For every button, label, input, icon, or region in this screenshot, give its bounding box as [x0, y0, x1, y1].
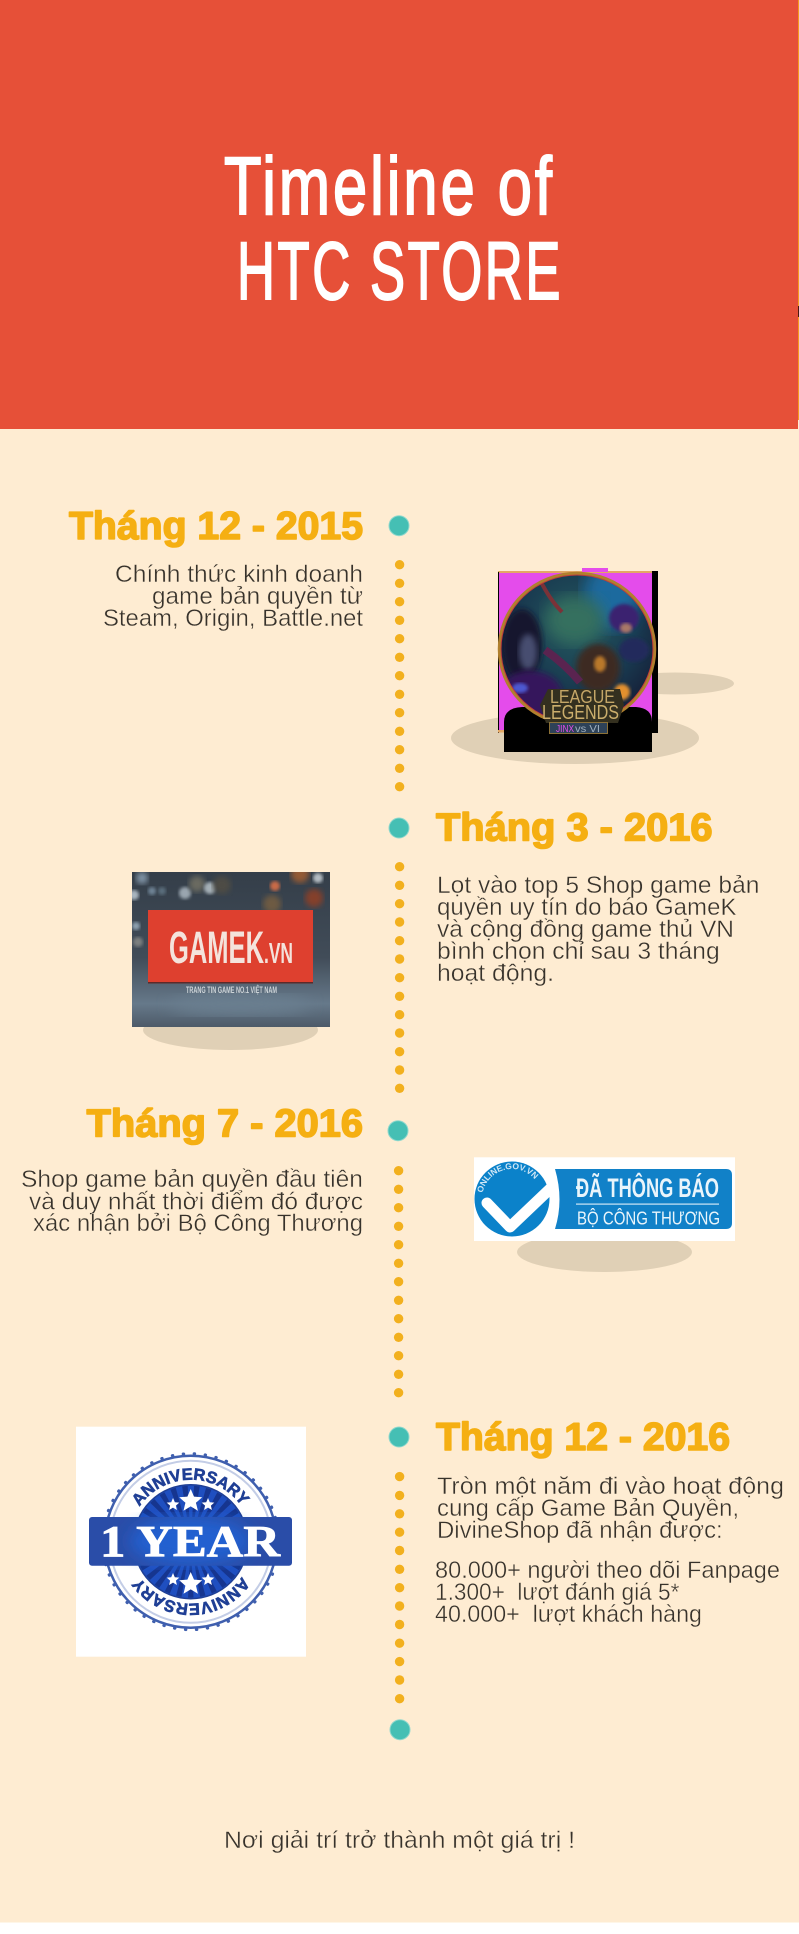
League of Legends logo: vs VI — [575, 724, 600, 735]
text block: July 2016 — [21, 1166, 363, 1237]
icon: GameK logo with shadow: GAMEK — [169, 922, 264, 973]
icon: GameK logo with shadow: .VN — [264, 938, 293, 970]
title: HTC STORE — [237, 226, 563, 317]
timeline node 3 — [388, 1121, 408, 1141]
text block: anniversary intro: DivineShop đã nhận được: — [437, 1517, 723, 1544]
timeline dots: segment 4 — [395, 1472, 404, 1703]
timeline node 1 — [389, 516, 409, 536]
timeline dots: segment 2 — [395, 862, 404, 1093]
title — [224, 141, 563, 317]
text block: March 2016: và cộng đồng game thủ VN — [437, 916, 734, 943]
timeline node 4 — [389, 1427, 409, 1447]
timeline node 2 — [389, 818, 409, 838]
text block: December 2015: game bản quyền từ — [152, 583, 363, 610]
text block: July 2016: xác nhận bởi Bộ Công Thương — [33, 1210, 363, 1237]
timeline dots: segment 1 — [395, 560, 404, 791]
heading: December 2015: Tháng 12 - 2015 — [69, 505, 363, 548]
heading: December 2016: Tháng 12 - 2016 — [436, 1416, 730, 1459]
text block: anniversary stats — [435, 1557, 780, 1628]
text block: December 2015 — [103, 561, 363, 632]
League of Legends logo — [540, 687, 624, 735]
heading: July 2016: Tháng 7 - 2016 — [87, 1103, 363, 1146]
icon: Ministry of Industry and Trade badge with shadow: ONLINE.GOV.VN — [478, 1163, 538, 1192]
League of Legends logo: LEGENDS — [542, 702, 619, 724]
text block: March 2016: bình chọn chỉ sau 3 tháng — [437, 938, 720, 965]
icon: 1 year anniversary seal: ANNIVERSARY — [130, 1576, 248, 1616]
icon: 1 year anniversary seal: ANNIVERSARY — [133, 1468, 251, 1507]
text block: anniversary intro: Tròn một năm đi vào hoạt động — [437, 1473, 784, 1500]
footer tagline: Nơi giải trí trở thành một giá trị ! — [224, 1827, 575, 1854]
League of Legends logo: JINX — [556, 724, 574, 735]
icon: Ministry of Industry and Trade badge with shadow: BỘ CÔNG THƯƠNG — [577, 1208, 720, 1228]
text block: anniversary stats: 1.300+ lượt đánh giá 5* — [435, 1579, 680, 1606]
panel: March 2016 text — [436, 807, 759, 987]
icon: 1 year anniversary seal: 1 YEAR — [100, 1517, 281, 1566]
text block: anniversary stats: 40.000+ lượt khách hàng — [435, 1601, 702, 1628]
icon: League of Legends badge with shadows — [451, 561, 734, 764]
text block: July 2016: và duy nhất thời điểm đó được — [29, 1188, 363, 1215]
text block: March 2016: quyền uy tín do báo GameK — [437, 894, 737, 921]
title: Timeline of — [224, 141, 555, 232]
timeline end node — [390, 1720, 410, 1740]
timeline dots: segment 3 — [394, 1166, 403, 1397]
text block: March 2016 — [437, 872, 759, 987]
icon: 1 year anniversary seal — [76, 1426, 306, 1657]
header banner — [0, 0, 799, 429]
text block: anniversary intro: cung cấp Game Bản Quyền, — [437, 1495, 739, 1522]
panel: December 2016 text — [435, 1416, 784, 1628]
League of Legends logo: LEAGUE — [550, 687, 615, 707]
icon: Ministry of Industry and Trade badge with shadow — [474, 1157, 735, 1272]
panel: July 2016 text — [21, 1103, 363, 1237]
icon: Ministry of Industry and Trade badge with shadow: ĐÃ THÔNG BÁO — [576, 1172, 719, 1203]
text block: July 2016: Shop game bản quyền đầu tiên — [21, 1166, 363, 1193]
text block: anniversary intro — [437, 1473, 784, 1544]
text block: anniversary stats: 80.000+ người theo dõi Fanpage — [435, 1557, 780, 1584]
icon: GameK logo with shadow — [129, 865, 330, 1050]
icon: GameK logo with shadow: TRANG TIN GAME NO.1 VIỆT NAM — [186, 984, 277, 996]
text block: December 2015: Chính thức kinh doanh — [115, 561, 363, 588]
panel: December 2015 text — [69, 505, 363, 632]
heading: March 2016: Tháng 3 - 2016 — [436, 807, 712, 850]
text block: December 2015: Steam, Origin, Battle.net — [103, 605, 363, 632]
text block: March 2016: Lọt vào top 5 Shop game bản — [437, 872, 759, 899]
text block: March 2016: hoạt động. — [437, 960, 554, 987]
